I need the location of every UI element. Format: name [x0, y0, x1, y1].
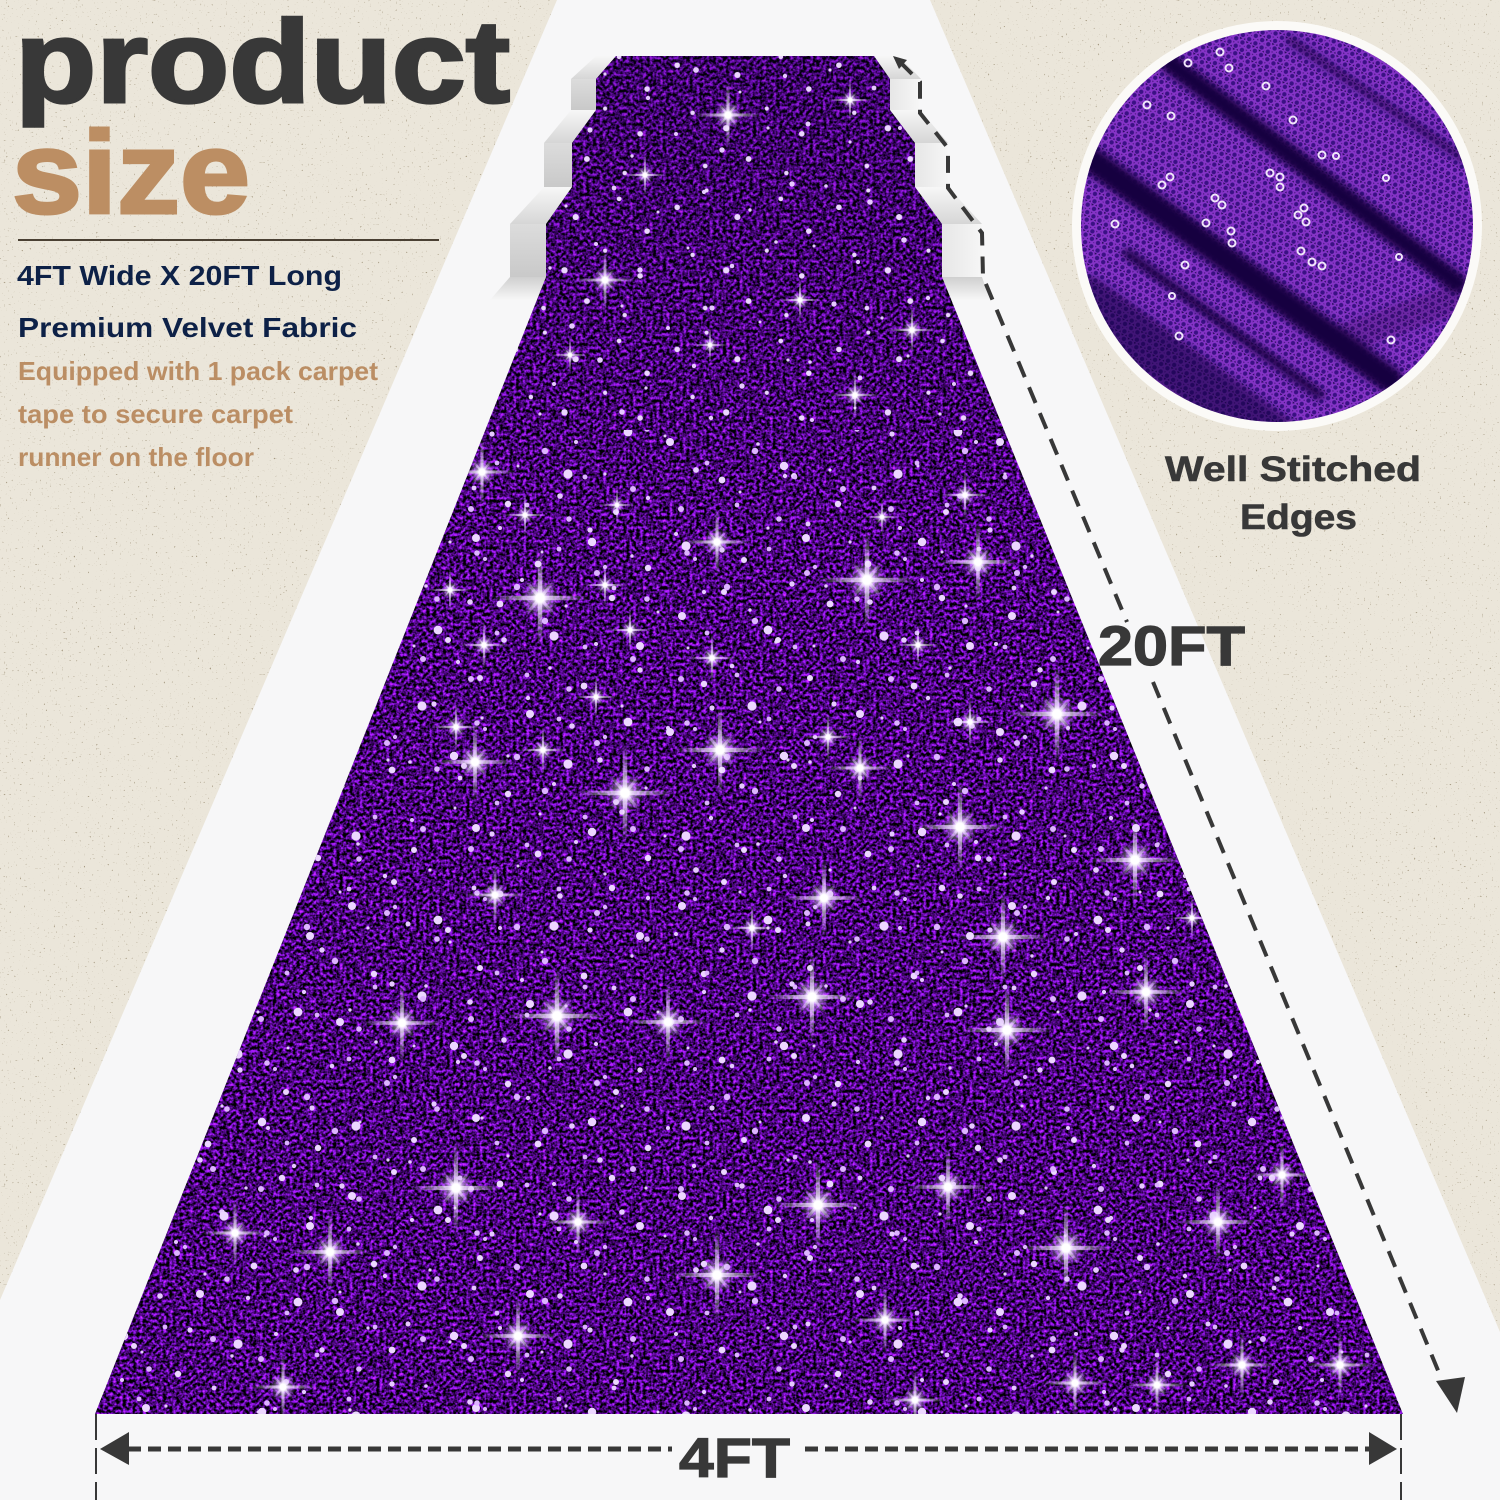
label: 4FT: 4FT — [679, 1426, 790, 1489]
sequin fabric close-up circle — [1070, 20, 1490, 450]
title: size: size — [12, 107, 250, 238]
sparkle stars — [202, 79, 1373, 1430]
20FT dimension arrow — [893, 56, 1465, 1413]
caption: well stitched edges: Well Stitched — [1165, 450, 1421, 489]
caption: well stitched edges: Edges — [1240, 498, 1357, 537]
spec text block: tape to secure carpet — [18, 399, 293, 429]
stairs — [490, 56, 990, 300]
divider line — [18, 239, 439, 241]
spec text block: 4FT Wide X 20FT Long — [17, 260, 342, 291]
caption: well stitched edges — [1165, 450, 1421, 537]
spec text block — [17, 260, 378, 472]
4FT dimension arrow — [96, 1414, 1401, 1500]
label: 20FT: 20FT — [1098, 614, 1245, 677]
spec text block: Equipped with 1 pack carpet — [18, 356, 378, 386]
spec text block: runner on the floor — [18, 442, 254, 472]
spec text block: Premium Velvet Fabric — [18, 312, 357, 343]
